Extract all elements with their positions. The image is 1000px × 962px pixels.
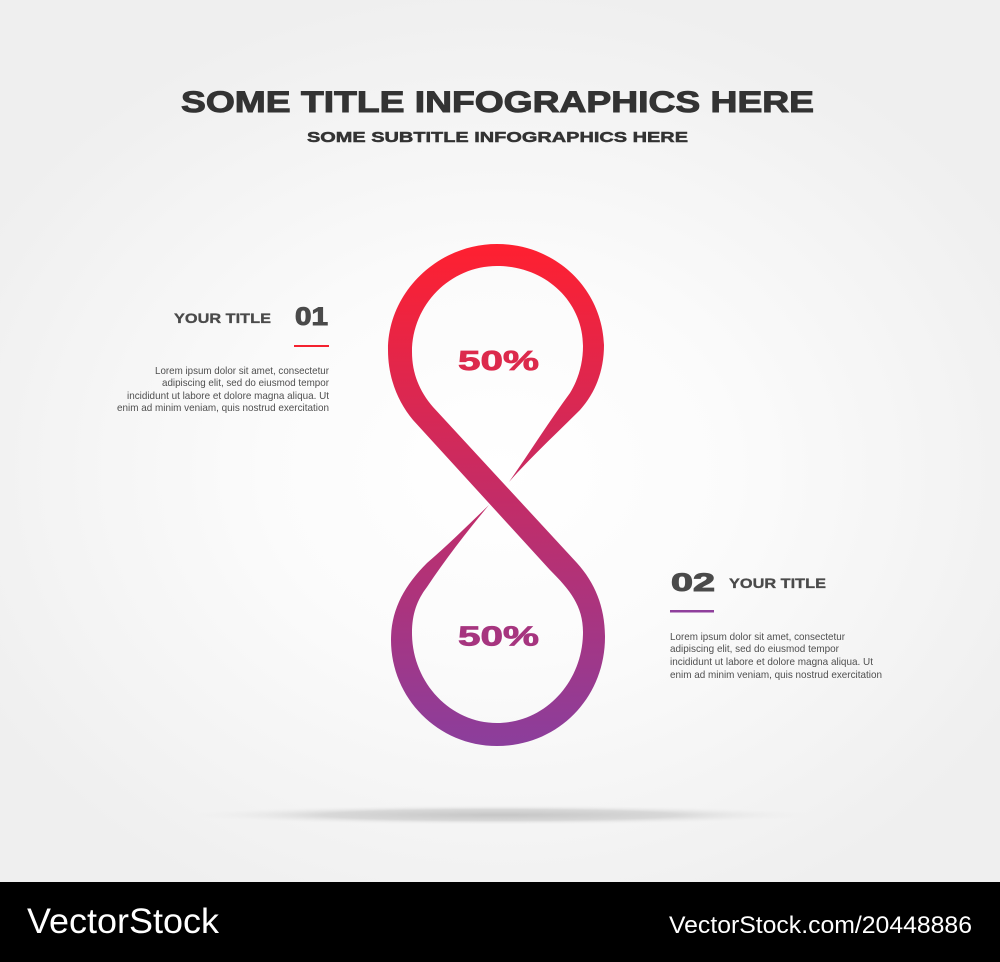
footer bar <box>0 882 1000 962</box>
body text 01: Lorem ipsum dolor sit amet, consectetur <box>155 365 329 377</box>
panel: item 02 <box>670 569 882 681</box>
body text 02 <box>670 631 882 681</box>
label: lower 50%: 50% <box>458 620 539 652</box>
accent line 01 <box>294 345 329 347</box>
label: upper 50%: 50% <box>458 345 539 376</box>
body text 01 <box>117 365 329 414</box>
footer id: VectorStock.com/20448886 <box>669 912 972 939</box>
heading: your title 01: YOUR TITLE <box>174 311 271 326</box>
body text 01: adipiscing elit, sed do eiusmod tempor <box>162 377 329 389</box>
footer logo: VectorStock <box>27 902 220 941</box>
body text 01: incididunt ut labore et dolore magna aliqua. Ut <box>127 390 329 402</box>
number 01: 01 <box>295 303 328 331</box>
ground shadow <box>180 805 820 825</box>
chart: figure-eight ribbon <box>388 244 605 746</box>
body text 02: Lorem ipsum dolor sit amet, consectetur <box>670 631 845 643</box>
body text 01: enim ad minim veniam, quis nostrud exercitation <box>117 402 329 414</box>
body text 02: adipiscing elit, sed do eiusmod tempor <box>670 643 839 655</box>
panel: item 01 <box>117 303 329 414</box>
subtitle: SOME SUBTITLE INFOGRAPHICS HERE <box>307 129 688 146</box>
accent line 02 <box>670 610 714 612</box>
body text 02: incididunt ut labore et dolore magna aliqua. Ut <box>670 656 873 668</box>
heading: your title 02: YOUR TITLE <box>729 576 826 591</box>
body text 02: enim ad minim veniam, quis nostrud exercitation <box>670 669 882 681</box>
number 02: 02 <box>671 569 715 597</box>
title: SOME TITLE INFOGRAPHICS HERE <box>181 86 814 119</box>
